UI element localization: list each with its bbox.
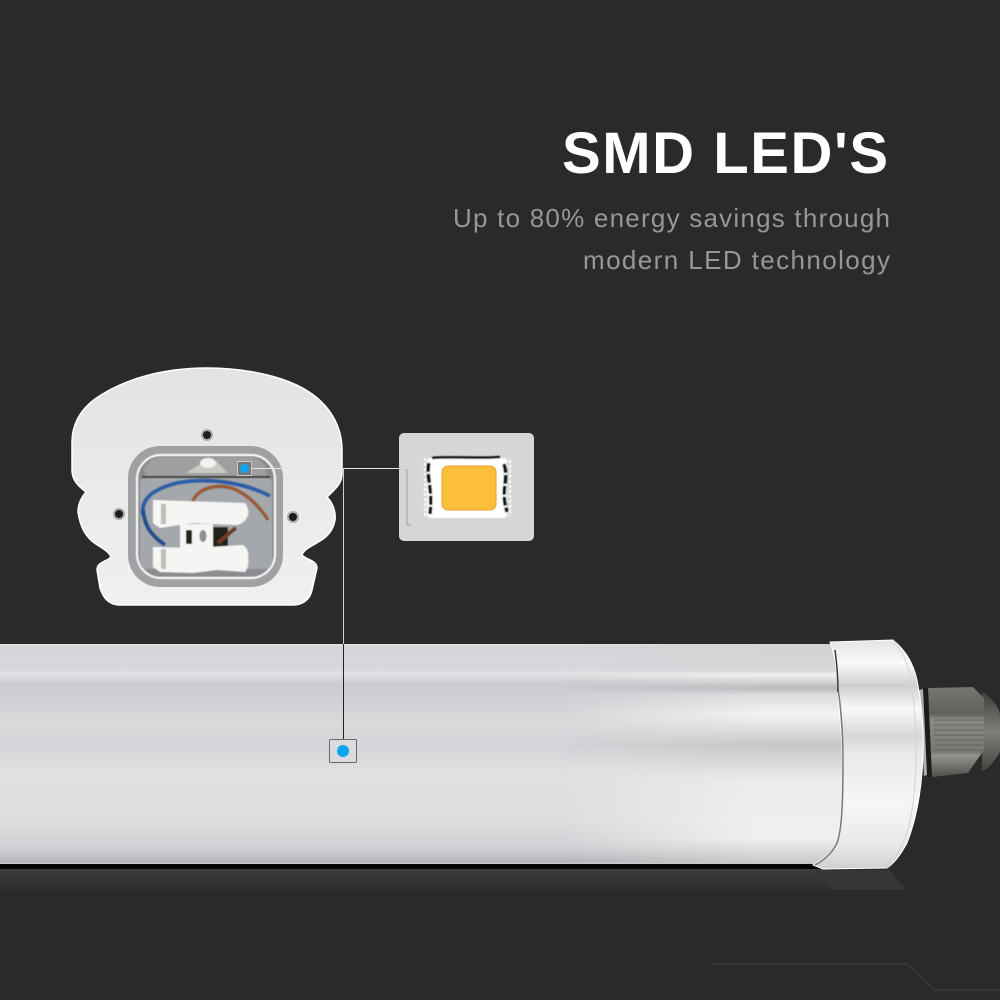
description text [453,203,890,275]
brown wire [192,486,268,520]
blue wire [143,481,270,515]
end plate with open terminal window [72,368,342,605]
LED die [442,466,496,510]
tube body [0,644,845,864]
end cap [813,640,923,869]
cable gland nut [919,687,984,777]
grey gasket [128,446,283,587]
LED on board [186,461,228,473]
callout: SMD LED chip close-up [399,433,534,541]
marker: LED on tube [330,740,356,762]
cable gland dome [982,692,1000,771]
title: SMD LED'S [562,121,888,186]
description text: Up to 80% energy savings through [453,203,890,233]
description text: modern LED technology [583,245,890,275]
end cap reflection [815,870,906,890]
connectors [153,500,248,573]
callout connector lines [251,468,399,739]
screw holes [114,430,298,522]
marker: LED on end plate [238,462,252,476]
decorative circuit line [712,964,1000,990]
floor reflection [0,868,830,894]
terminal window [137,455,275,578]
